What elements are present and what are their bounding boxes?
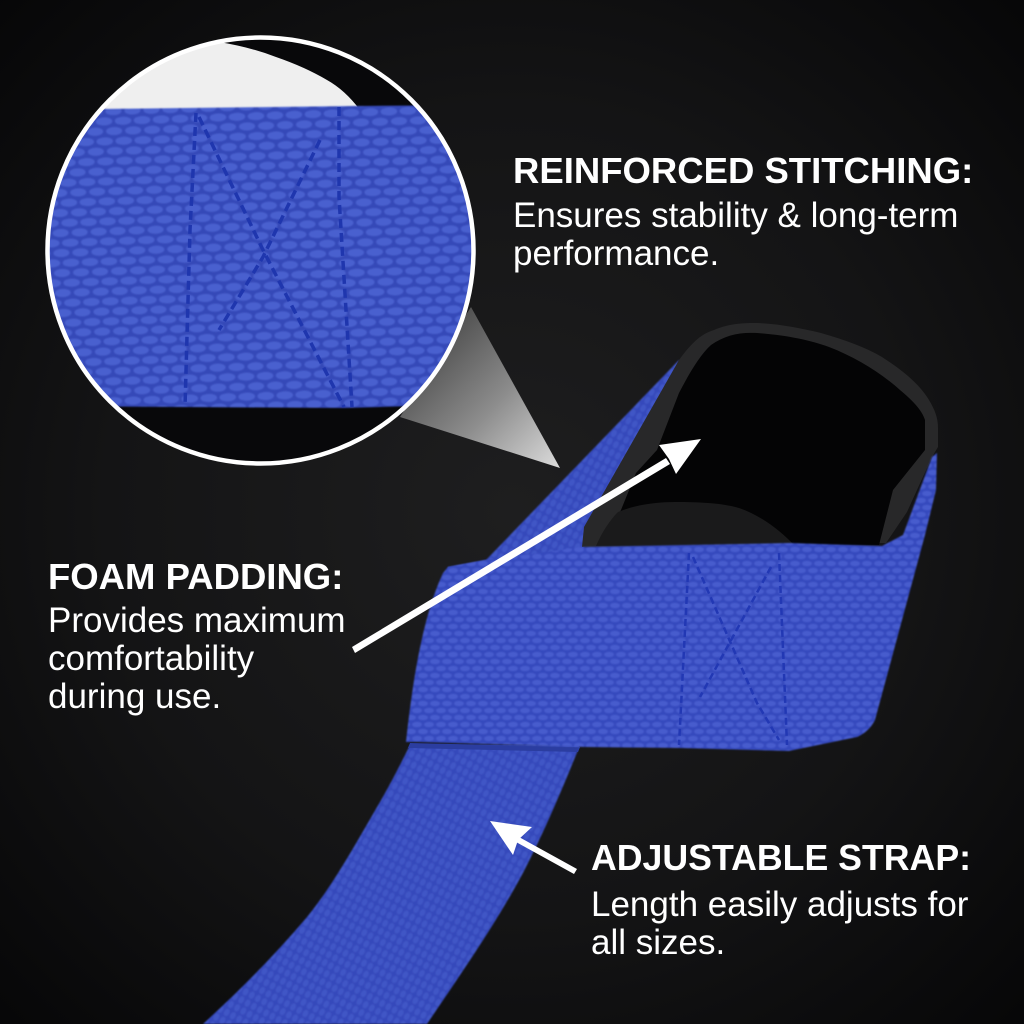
text: adjustable strap: all sizes. xyxy=(591,923,725,962)
text: reinforced stitching: Ensures stability & long-term xyxy=(513,196,958,235)
circle outline xyxy=(48,38,474,464)
text: reinforced stitching: performance. xyxy=(513,234,719,273)
text: foam padding: Provides maximum xyxy=(48,601,346,640)
strap tail xyxy=(203,743,580,1024)
text: foam padding: comfortability xyxy=(48,639,254,678)
text: reinforced stitching xyxy=(513,150,973,273)
text: adjustable strap: Length easily adjusts for xyxy=(591,885,968,924)
arrow: adjustable strap xyxy=(490,821,577,874)
text: reinforced stitching: REINFORCED STITCHING: xyxy=(513,150,973,191)
magnified circle xyxy=(50,43,472,461)
strap front loop xyxy=(406,453,937,751)
text: foam padding: FOAM PADDING: xyxy=(48,556,343,597)
text: foam padding xyxy=(48,556,346,716)
foam padding xyxy=(582,323,938,547)
zoom cone xyxy=(400,307,560,468)
text: adjustable strap xyxy=(591,838,971,962)
stitching on strap xyxy=(679,553,787,745)
strap rear diagonal xyxy=(448,360,690,620)
text: adjustable strap: ADJUSTABLE STRAP: xyxy=(591,838,971,878)
arrow: foam padding xyxy=(352,439,701,653)
text: foam padding: during use. xyxy=(48,677,221,716)
